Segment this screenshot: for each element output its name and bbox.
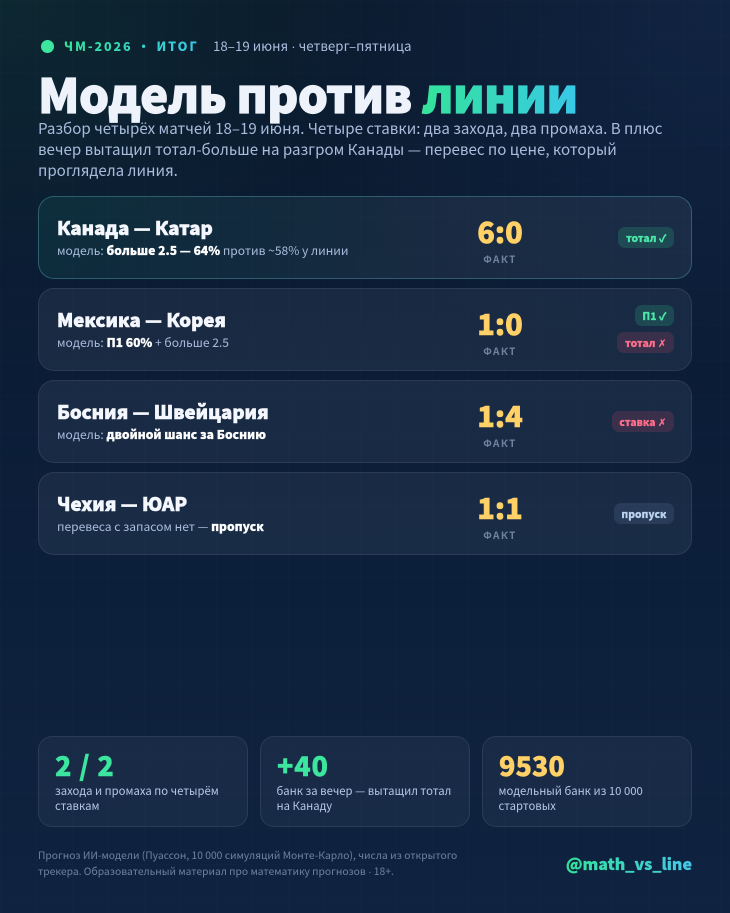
stat caption: ставкам (55, 798, 99, 814)
handle: @math_vs_line (566, 851, 692, 875)
stat caption: захода и промаха по четырём (55, 783, 219, 799)
eyebrow label: ЧМ-2026 · ИТОГ (64, 36, 199, 55)
panel: Канада — Катар (38, 196, 692, 279)
status dot (41, 40, 54, 53)
stat: hits and misses (38, 736, 248, 827)
score label: ФАКТ (483, 251, 517, 266)
model note: модель: двойной шанс за Боснию (57, 426, 266, 443)
date line: 18–19 июня · четверг–пятница (213, 36, 412, 55)
match title: Босния — Швейцария (57, 398, 269, 425)
badge: P1 hit (635, 305, 674, 326)
stat value: 9530 (499, 745, 565, 784)
panel: Мексика — Корея (38, 288, 692, 371)
model note: перевеса с запасом нет — пропуск (57, 518, 264, 535)
stat value: +40 (277, 745, 329, 784)
score label: ФАКТ (483, 435, 517, 450)
stat caption: банк за вечер — вытащил тотал (276, 783, 451, 799)
stat: evening profit (260, 736, 470, 827)
intro text (38, 117, 662, 181)
badge: bet miss: ставка ✗ (619, 414, 666, 429)
title: Модель против линии (38, 58, 578, 127)
badge: total miss: тотал ✗ (625, 335, 666, 350)
stat caption (498, 783, 643, 814)
badge: P1 hit: П1 ✓ (642, 308, 666, 323)
stat value: 2 / 2 (55, 745, 114, 784)
match title: Чехия — ЮАР (57, 490, 187, 517)
badge: total miss (617, 332, 674, 353)
intro text: проглядела линия. (38, 159, 178, 181)
disclaimer: трекера. Образовательный материал про математику прогнозов · 18+. (38, 863, 394, 878)
panel: Босния — Швейцария (38, 380, 692, 463)
badge: total hit (618, 227, 674, 248)
stat caption: модельный банк из 10 000 (498, 783, 643, 799)
score: 1:4 (477, 394, 523, 436)
badge: bet miss (612, 411, 674, 432)
score: 1:1 (477, 486, 523, 528)
match title: Канада — Катар (57, 214, 213, 241)
badge: skip: пропуск (621, 506, 666, 521)
disclaimer (38, 847, 457, 878)
score label: ФАКТ (483, 343, 517, 358)
badge: total hit: тотал ✓ (626, 230, 666, 245)
match title: Мексика — Корея (57, 306, 226, 333)
badge: skip (614, 503, 674, 524)
stat caption (55, 783, 219, 814)
model note: модель: больше 2.5 — 64% против ~58% у линии (57, 242, 348, 259)
stat caption: стартовых (498, 798, 556, 814)
score label: ФАКТ (483, 527, 517, 542)
model note: модель: П1 60% + больше 2.5 (57, 334, 229, 351)
score: 6:0 (477, 210, 523, 252)
disclaimer: Прогноз ИИ-модели (Пуассон, 10 000 симуляций Монте-Карло), числа из открытого (38, 847, 457, 862)
stat: model bankroll (482, 736, 692, 827)
stat caption (276, 783, 451, 814)
score: 1:0 (477, 302, 523, 344)
stat caption: на Канаду (276, 798, 332, 814)
intro text: вечер вытащил тотал-больше на разгром Канады — перевес по цене, который (38, 138, 617, 160)
intro text: Разбор четырёх матчей 18–19 июня. Четыре ставки: два захода, два промаха. В плюс (38, 117, 662, 139)
panel: Чехия — ЮАР (38, 472, 692, 555)
